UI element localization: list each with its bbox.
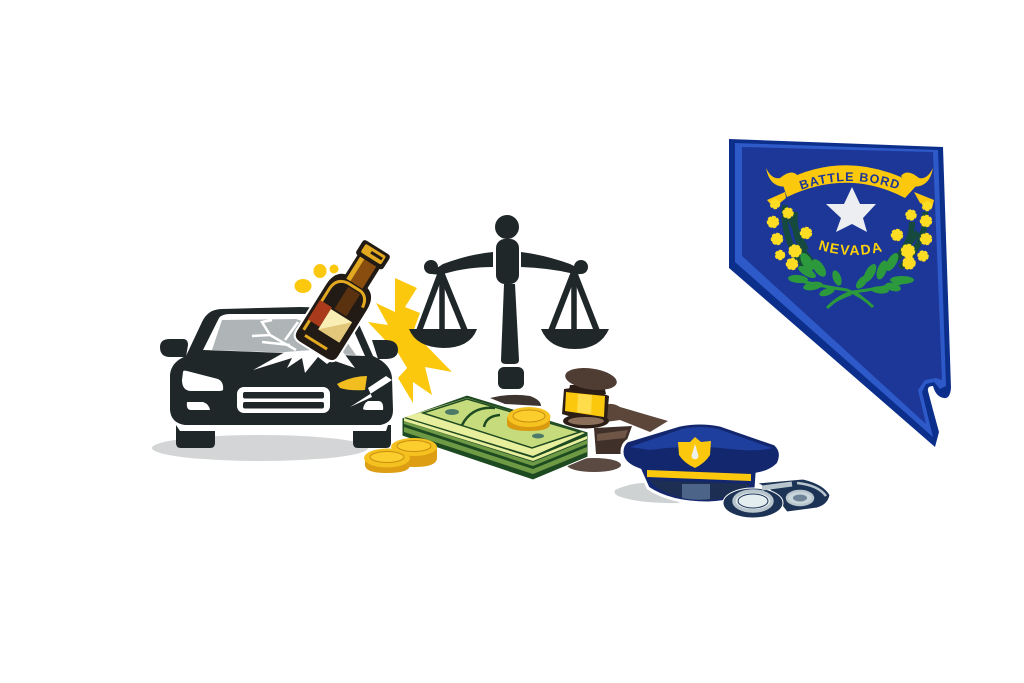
banner text: BATTLE BORD [799,172,899,190]
banner with motto [766,165,933,198]
icon: gold coins [364,407,550,473]
icon: gavel [490,365,668,472]
NEVADA label: NEVADA [818,240,882,256]
panel: Nevada state flag map [729,139,951,447]
icon: handcuffs [723,479,830,518]
white star [826,187,876,232]
icon: police cap [614,423,780,503]
map blue face [742,147,942,424]
icon: scales of justice [409,215,609,389]
sagebrush wreath [767,192,934,308]
map bevel [735,143,946,437]
icon: car ground shadow [152,435,368,461]
icon: stack of cash [402,395,588,480]
map outline [729,139,951,447]
icon: beer bottle [292,233,399,364]
icon: yellow droplets [294,264,338,293]
icon: yellow impact burst [368,278,452,403]
icon: dark car front with cracked windshield [160,307,398,448]
